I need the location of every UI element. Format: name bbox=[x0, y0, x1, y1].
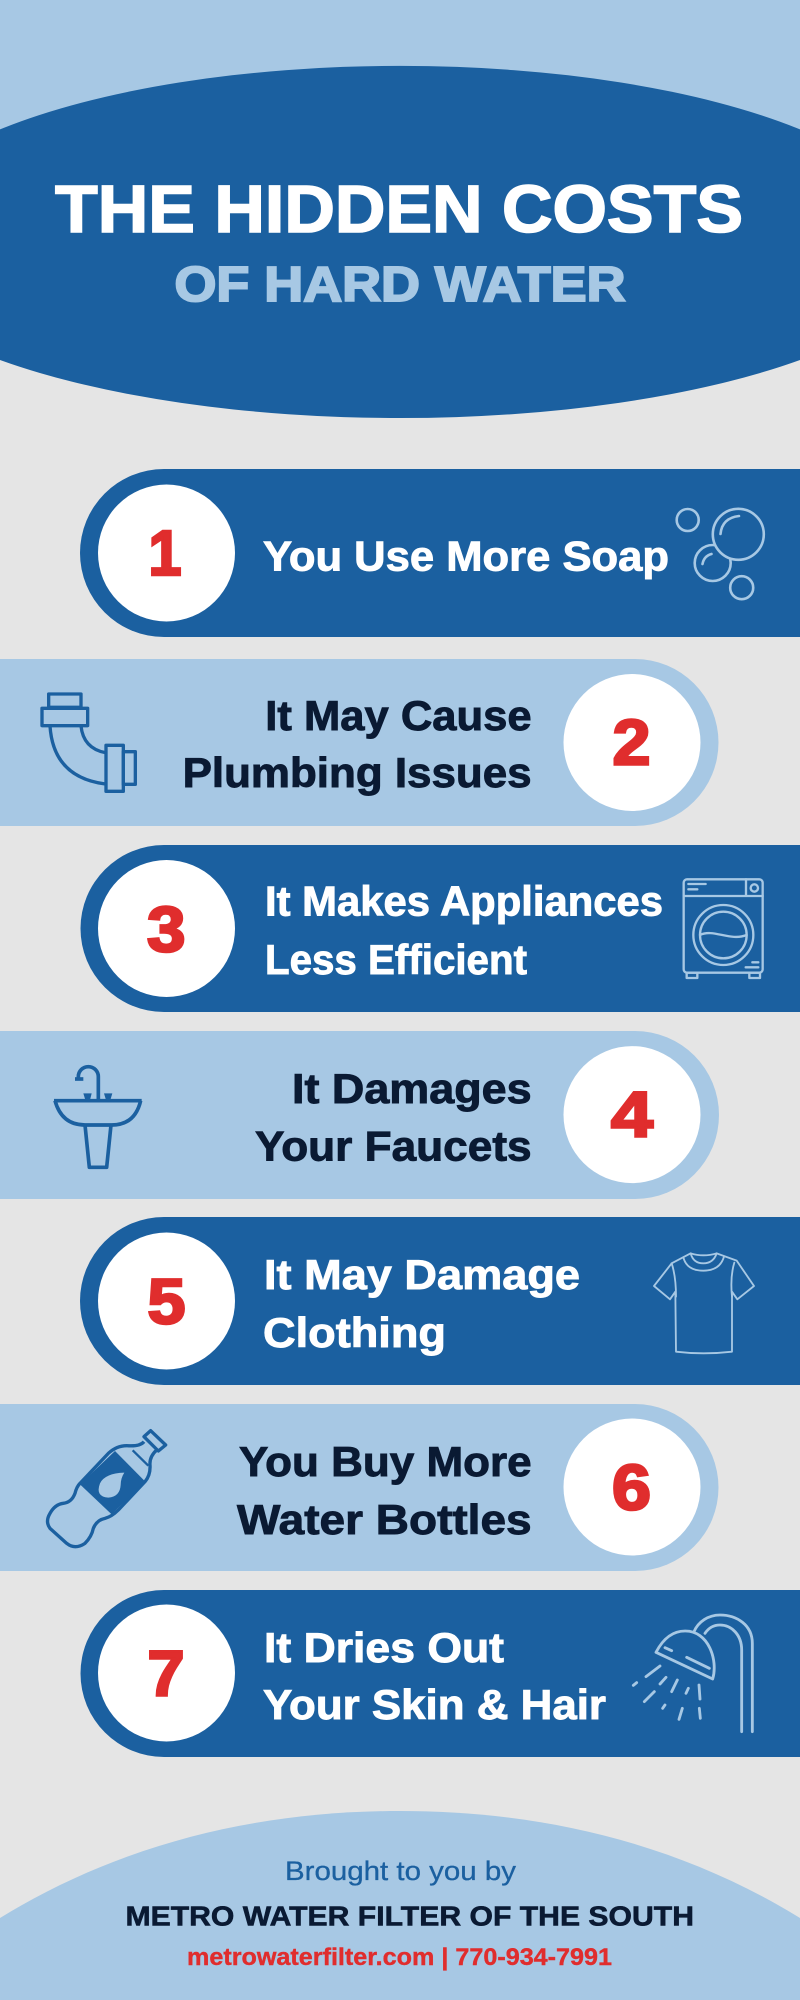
text: you buy more water bottles: Water Bottles bbox=[237, 1496, 532, 1543]
text: it damages your faucets: It Damages bbox=[292, 1065, 532, 1112]
title: THE HIDDEN COSTS bbox=[55, 172, 743, 247]
subtitle: OF HARD WATER bbox=[174, 258, 626, 312]
text: it may damage clothing: It May Damage bbox=[264, 1251, 580, 1298]
panel: item 6 bbox=[0, 1404, 718, 1571]
text: it dries out your skin & hair: It Dries Out bbox=[264, 1624, 504, 1671]
icon: sink bbox=[54, 1067, 142, 1167]
number 3: 3 bbox=[147, 894, 186, 966]
panel: item 7 bbox=[81, 1590, 800, 1757]
footer bbox=[0, 1811, 800, 2000]
panel: item 4 bbox=[0, 1031, 719, 1199]
number 4: 4 bbox=[611, 1078, 653, 1150]
text: it may cause plumbing issues: It May Cause bbox=[265, 692, 532, 739]
icon: washing machine bbox=[684, 879, 763, 978]
footer: company name: METRO WATER FILTER OF THE SOUTH bbox=[126, 1900, 694, 1932]
number 5: 5 bbox=[148, 1266, 186, 1338]
number 7: 7 bbox=[148, 1638, 184, 1710]
text: it may damage clothing bbox=[263, 1251, 580, 1356]
text: it may cause plumbing issues: Plumbing Issues bbox=[183, 749, 532, 796]
text: it makes appliances less efficient bbox=[265, 878, 663, 983]
text: it damages your faucets bbox=[255, 1065, 532, 1170]
text: it may damage clothing: Clothing bbox=[263, 1309, 446, 1356]
icon: t-shirt bbox=[654, 1253, 754, 1353]
footer: contact details: metrowaterfilter.com | 770-934-7991 bbox=[187, 1944, 612, 1971]
text: you use more soap: You Use More Soap bbox=[263, 532, 669, 580]
text: it may cause plumbing issues bbox=[183, 692, 532, 796]
text: you buy more water bottles bbox=[237, 1438, 532, 1543]
text: you buy more water bottles: You Buy More bbox=[239, 1438, 532, 1485]
panel: item 1 bbox=[80, 469, 800, 637]
text: it makes appliances less efficient: Less Efficient bbox=[265, 936, 527, 983]
number 1: 1 bbox=[148, 517, 182, 589]
text: it dries out your skin & hair: Your Skin & Hair bbox=[263, 1681, 606, 1728]
icon: bubbles bbox=[677, 509, 764, 599]
icon: water bottle bbox=[47, 1431, 166, 1547]
number 6: 6 bbox=[612, 1452, 651, 1524]
panel: item 3 bbox=[81, 845, 800, 1012]
panel: item 2 bbox=[0, 659, 718, 826]
footer: brought to you by: Brought to you by bbox=[285, 1856, 517, 1886]
text: it dries out your skin & hair bbox=[263, 1624, 606, 1728]
icon: shower bbox=[633, 1615, 752, 1732]
text: it damages your faucets: Your Faucets bbox=[255, 1122, 532, 1170]
icon: pipe bbox=[42, 694, 135, 791]
panel: item 5 bbox=[80, 1217, 800, 1385]
text: it makes appliances less efficient: It Makes Appliances bbox=[265, 878, 663, 924]
header banner bbox=[0, 0, 800, 418]
number 2: 2 bbox=[612, 706, 650, 778]
